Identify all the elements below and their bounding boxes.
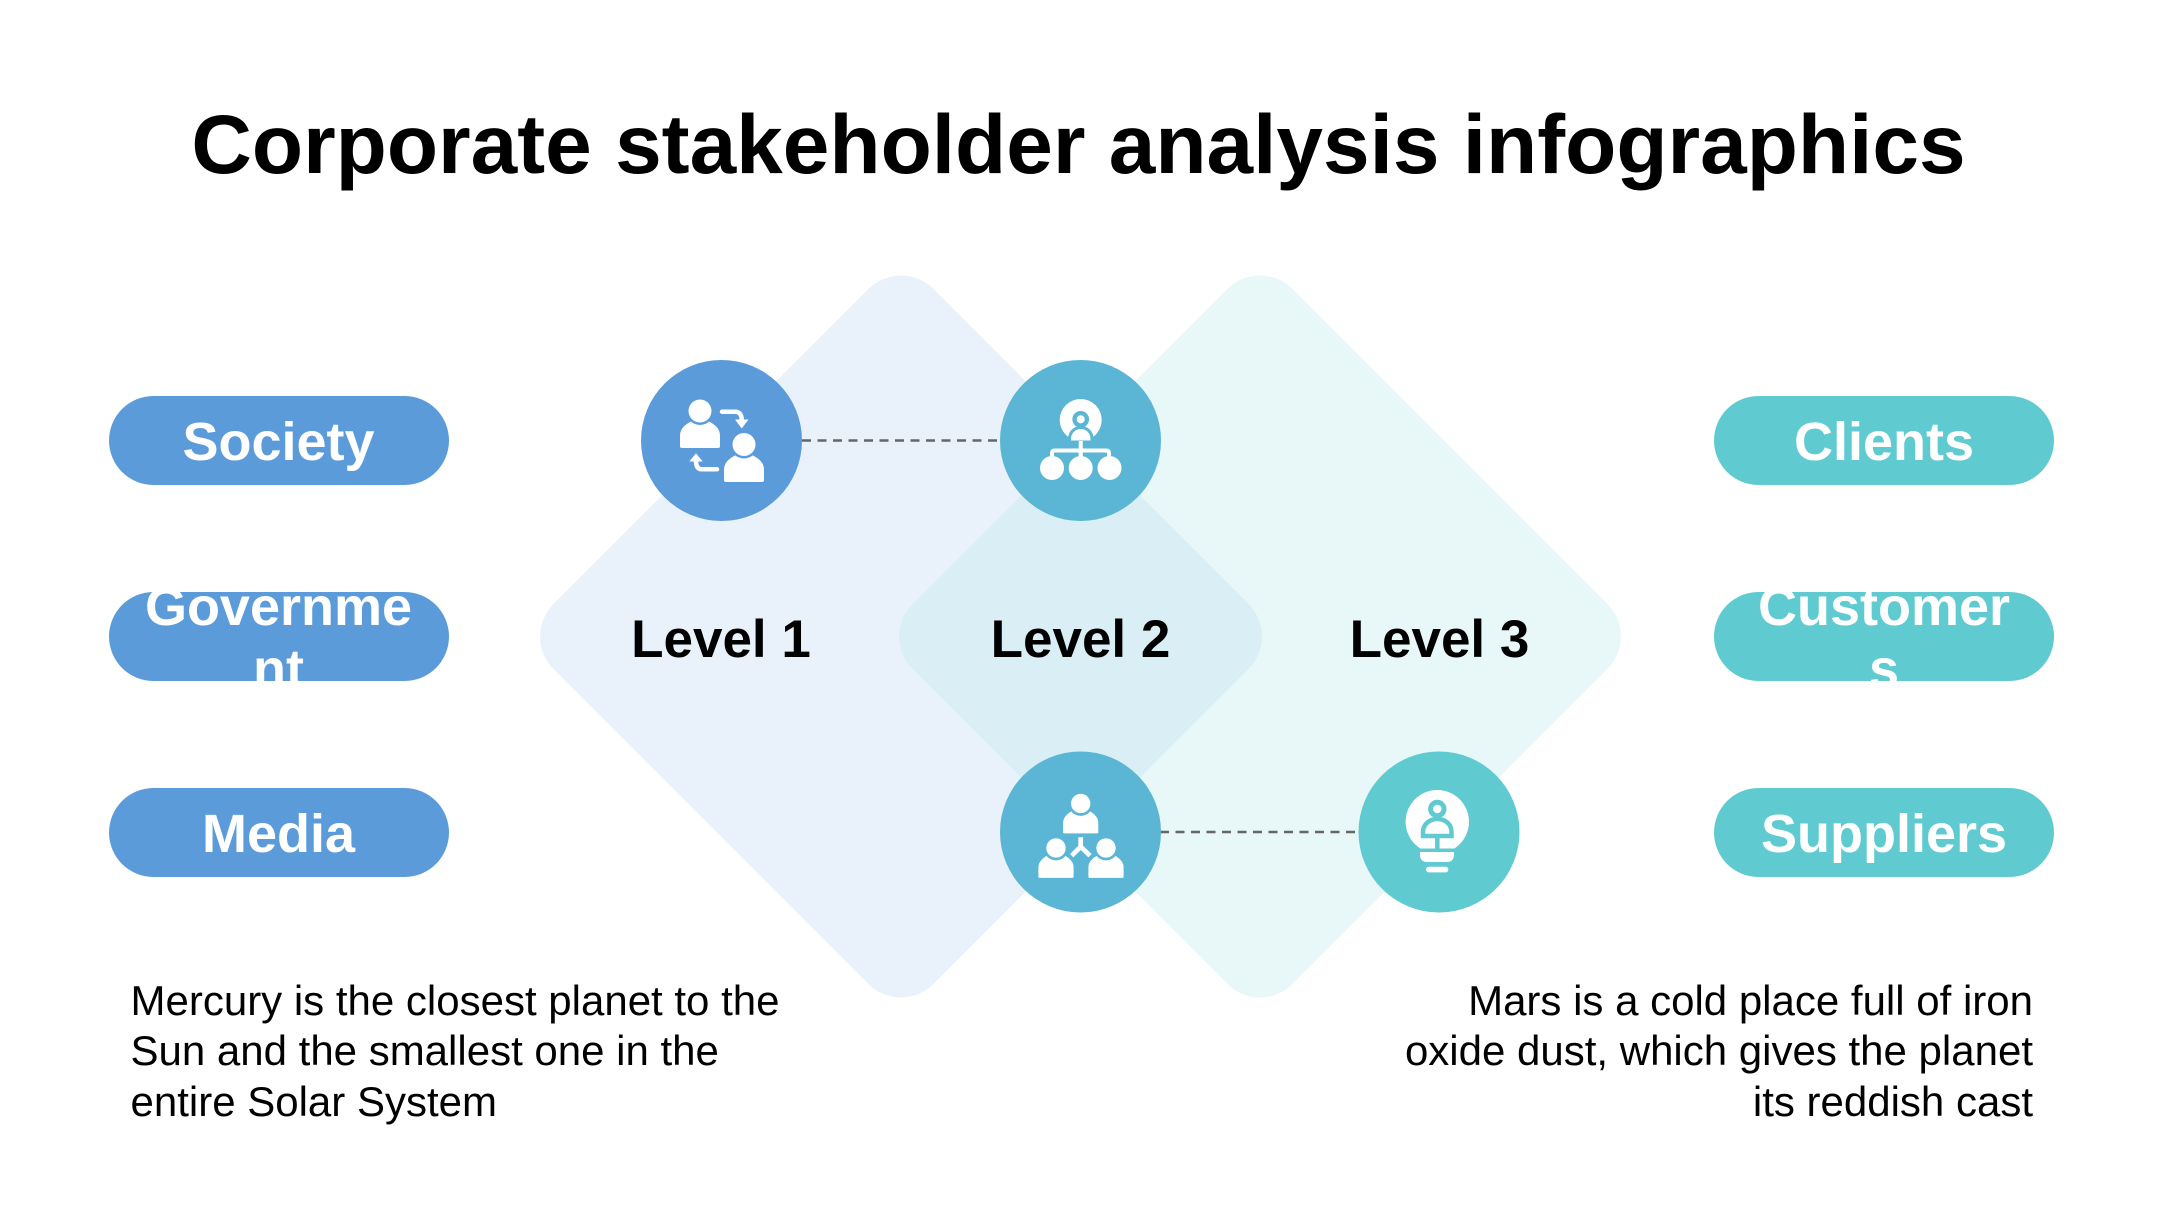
- pill: Media: Media: [202, 804, 355, 864]
- text block: Mars: [1405, 976, 2033, 1125]
- title: Corporate stakeholder analysis infographics: [191, 97, 1966, 191]
- text block: Mars: its reddish cast: [1753, 1078, 2033, 1125]
- pill: Customers: [1714, 592, 2054, 681]
- text block: Mercury: [130, 976, 779, 1125]
- pill: Society: [108, 396, 448, 485]
- pill: Government: [108, 592, 448, 681]
- diamond: level 1: [521, 257, 1281, 1016]
- icon: org tree: [1000, 360, 1161, 521]
- diamond overlap: level 2: [899, 496, 1262, 778]
- icon: idea bulb person: [1358, 752, 1520, 912]
- text block: Mercury: entire Solar System: [130, 1078, 497, 1125]
- diamond: level 3: [880, 257, 1640, 1016]
- icon: people group: [1000, 752, 1161, 912]
- pill: Suppliers: [1714, 788, 2054, 877]
- label: Level 3: Level 3: [1350, 610, 1529, 668]
- pill: Clients: Clients: [1794, 412, 1974, 472]
- pill: Media: [108, 788, 448, 877]
- dashed connector top: [802, 439, 1012, 442]
- text block: Mars: Mars is a cold place full of iron: [1468, 976, 2033, 1024]
- venn diagram with icons: [540, 276, 1621, 998]
- pill: Society: Society: [182, 412, 375, 472]
- text block: Mars: oxide dust, which gives the planet: [1405, 1027, 2033, 1074]
- label: Level 2: Level 2: [991, 610, 1170, 668]
- pill: Clients: [1714, 396, 2054, 485]
- pill: Suppliers: Suppliers: [1761, 804, 2007, 864]
- label: Level 1: Level 1: [631, 610, 811, 668]
- icon: people exchange: [641, 360, 802, 521]
- text block: Mercury: Sun and the smallest one in the: [130, 1027, 719, 1074]
- text block: Mercury: Mercury is the closest planet to the: [130, 976, 779, 1024]
- dashed connector bottom: [1160, 831, 1370, 833]
